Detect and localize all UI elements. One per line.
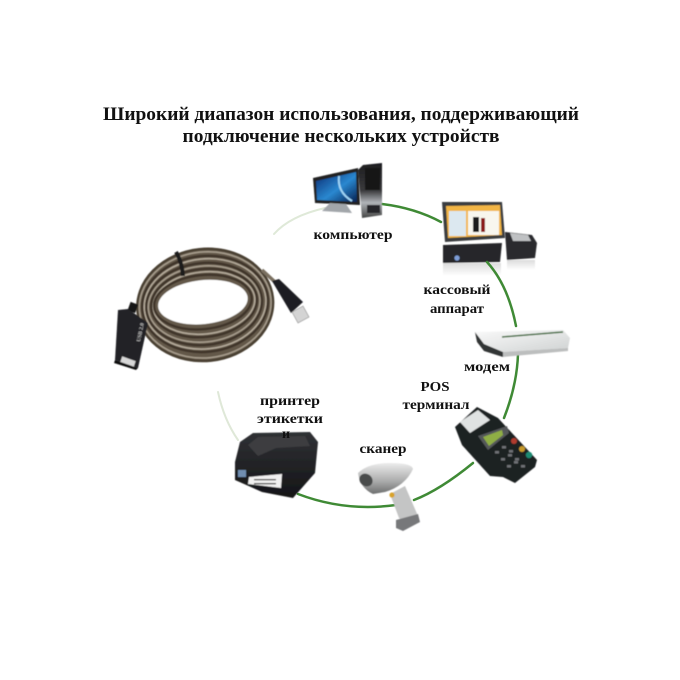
icon: POS terminal [455, 407, 537, 483]
cable tie [176, 252, 183, 276]
label: label printer: принтер [260, 394, 320, 409]
label: cash register: аппарат [430, 302, 484, 317]
label: POS terminal: терминал [402, 398, 470, 413]
label: label printer [257, 394, 323, 442]
USB plug [262, 270, 309, 323]
label: computer: компьютер [314, 227, 392, 242]
label: label printer: этикетки [257, 412, 323, 427]
icon: barcode scanner [357, 463, 420, 531]
label: modem: модем [464, 360, 511, 375]
green arc: register to modem [487, 262, 516, 326]
extender box: USB 2.0 [136, 322, 146, 342]
label: label printer: и [282, 427, 290, 442]
USB extension cable [114, 241, 309, 370]
POS screen [442, 202, 505, 242]
connection ring: faded and green arcs [218, 204, 518, 507]
title: Широкий диапазон использования, поддерживающий [103, 105, 579, 125]
receipt printer [505, 232, 537, 260]
label: POS terminal: POS [420, 380, 450, 395]
label: scanner: сканер [360, 442, 407, 457]
title [103, 105, 579, 147]
label: POS terminal [402, 380, 470, 413]
label: cash register: кассовый [424, 283, 490, 298]
cash drawer [443, 243, 502, 263]
cable coils [131, 241, 280, 369]
icon: cash register [442, 202, 537, 276]
icon: computer [313, 163, 382, 218]
icon: label printer [235, 432, 318, 498]
label: cash register [424, 283, 490, 317]
icon: modem [475, 330, 570, 357]
extender box [114, 302, 148, 370]
title: подключение нескольких устройств [182, 127, 500, 147]
